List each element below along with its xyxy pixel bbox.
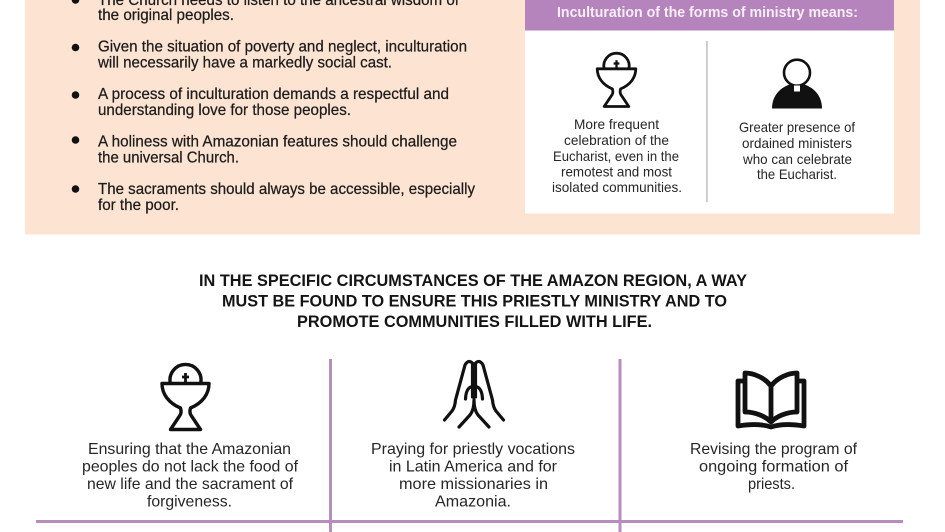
bullet: Amazonian holiness [72, 134, 457, 166]
card: forms of ministry [525, 0, 894, 214]
bullet: listen to ancestral wisdom: the original peoples. [98, 7, 234, 24]
text: more frequent celebration: Eucharist, even in the [553, 148, 679, 164]
bullet: social cast: will necessarily have a markedly social cast. [97, 54, 392, 72]
text: revising: priests. [748, 476, 795, 493]
bullet: listen to ancestral wisdom [72, 0, 460, 24]
icon: praying hands [444, 362, 504, 427]
column: praying for vocations [371, 362, 575, 510]
text: greater presence: the Eucharist. [757, 166, 837, 182]
bullet: respectful love [72, 86, 449, 119]
text: more frequent celebration: isolated communities. [552, 179, 682, 195]
text: greater presence [739, 119, 855, 182]
icon: chalice [597, 53, 636, 107]
text: ensuring: forgiveness. [147, 494, 232, 510]
text: more frequent celebration: remotest and most [561, 164, 672, 180]
heading [199, 271, 747, 331]
column: ongoing formation [690, 373, 858, 493]
bullet: respectful love: A process of inculturation demands a respectful and [98, 86, 449, 103]
bullet: Amazonian holiness: the universal Church. [98, 150, 239, 166]
bullet: accessible sacraments: for the poor. [98, 197, 179, 214]
bullet list [72, 0, 475, 214]
heading: PROMOTE COMMUNITIES FILLED WITH LIFE. [297, 312, 652, 331]
text: greater presence: Greater presence of [739, 119, 855, 135]
text: praying: in Latin America and for [389, 458, 558, 476]
bullet: accessible sacraments [72, 181, 475, 214]
column: food of new life [82, 364, 299, 510]
text: ensuring [82, 441, 299, 510]
bullet: social cast [72, 38, 467, 72]
bullet: respectful love: understanding love for those peoples. [98, 102, 351, 119]
bullet: Amazonian holiness: A holiness with Amazonian features should challenge [98, 134, 457, 150]
text: praying: more missionaries in [399, 476, 548, 493]
icon: chalice [162, 364, 209, 430]
heading: IN THE SPECIFIC CIRCUMSTANCES OF THE AMAZON REGION, A WAY [199, 271, 747, 290]
text: revising [690, 441, 858, 493]
text: praying [371, 441, 575, 510]
text: ensuring: new life and the sacrament of [87, 476, 294, 493]
text: greater presence: ordained ministers [742, 135, 852, 151]
bullet: accessible sacraments: The sacraments should always be accessible, especially [98, 181, 475, 198]
bullet: social cast: Given the situation of poverty and neglect, inculturation [98, 38, 467, 56]
icon: priest [772, 60, 822, 108]
text: more frequent celebration: celebration of the [564, 132, 669, 148]
text: more frequent celebration [552, 116, 682, 195]
text: praying: Amazonia. [435, 494, 511, 510]
card header: Inculturation of the forms of ministry means: [557, 4, 858, 21]
heading: MUST BE FOUND TO ENSURE THIS PRIESTLY MINISTRY AND TO [222, 292, 727, 310]
text: more frequent celebration: More frequent [574, 116, 659, 132]
icon: open book [738, 373, 804, 427]
text: praying: Praying for priestly vocations [371, 441, 575, 458]
text: revising: Revising the program of [690, 441, 858, 458]
text: ensuring: Ensuring that the Amazonian [88, 441, 291, 458]
text: ensuring: peoples do not lack the food of [82, 458, 299, 476]
text: revising: ongoing formation of [699, 458, 849, 476]
text: greater presence: who can celebrate [742, 151, 852, 167]
panel: inculturation principles [25, 0, 920, 234]
card header [525, 0, 894, 30]
